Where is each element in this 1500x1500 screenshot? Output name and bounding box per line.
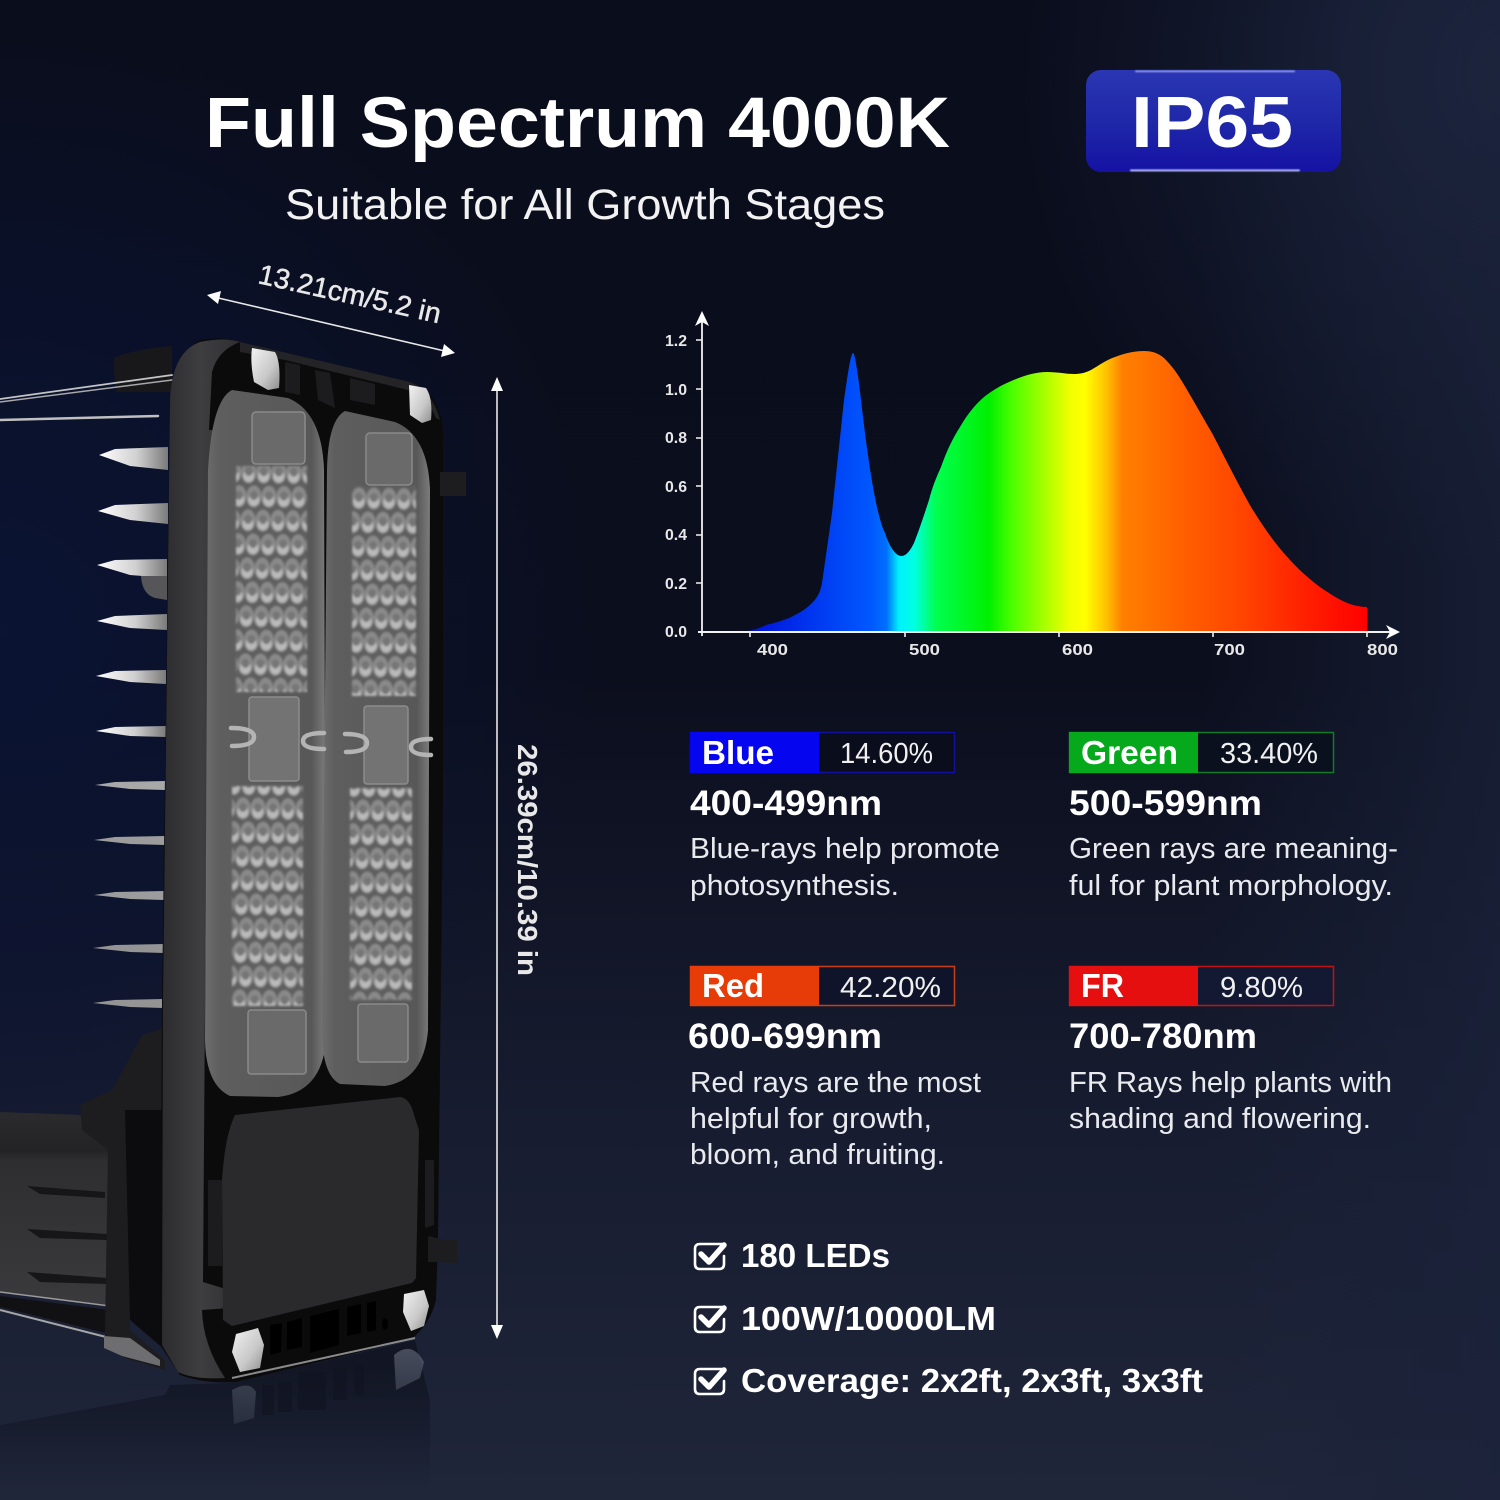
feature: coverage: Coverage: 2x2ft, 2x3ft, 3x3ft bbox=[741, 1362, 1203, 1399]
badge: FR bbox=[1069, 966, 1334, 1006]
x axis labels bbox=[757, 642, 1398, 659]
y axis labels: 0.6 bbox=[665, 479, 687, 496]
description: bloom, and fruiting. bbox=[690, 1139, 945, 1171]
width arrow bbox=[207, 291, 455, 357]
description: photosynthesis. bbox=[690, 870, 899, 902]
range: 500-599nm bbox=[1069, 784, 1262, 823]
top frame edge bbox=[240, 342, 440, 420]
description: helpful for growth, bbox=[690, 1103, 932, 1135]
x axis labels: 400 bbox=[757, 642, 788, 659]
LEDs upper left bbox=[236, 466, 307, 692]
LEDs lower right bbox=[350, 788, 412, 1000]
panel: far red band bbox=[1069, 966, 1392, 1135]
height arrow bbox=[491, 377, 503, 1339]
right lens bbox=[322, 411, 430, 1086]
y axis labels: 1.2 bbox=[665, 333, 687, 350]
subtitle: Suitable for All Growth Stages bbox=[285, 181, 885, 229]
feature: wattage: 100W/10000LM bbox=[741, 1300, 996, 1337]
badge: green: 33.40% bbox=[1220, 738, 1318, 770]
fixture body bbox=[160, 338, 443, 1382]
description: Red rays are the most bbox=[690, 1067, 981, 1099]
spectrum chart bbox=[665, 311, 1400, 659]
clip bottom bbox=[358, 1004, 408, 1062]
description: FR Rays help plants with bbox=[1069, 1067, 1392, 1099]
description bbox=[690, 833, 1000, 902]
panel: red band bbox=[688, 966, 981, 1171]
top magnets bbox=[251, 348, 431, 423]
y axis labels: 0.4 bbox=[665, 527, 687, 544]
LEDs upper right bbox=[352, 486, 416, 696]
range: 400-499nm bbox=[690, 784, 882, 823]
y axis labels: 0.8 bbox=[665, 430, 687, 447]
badge: red: Red bbox=[702, 967, 764, 1004]
y axis labels: 1.0 bbox=[665, 382, 687, 399]
icon: checkbox bbox=[695, 1369, 724, 1394]
badge: blue: 14.60% bbox=[840, 738, 933, 770]
badge: FR: FR bbox=[1081, 967, 1124, 1004]
badge: blue: Blue bbox=[702, 734, 774, 771]
knob on top of heat sink bbox=[114, 346, 172, 392]
badge: FR: 9.80% bbox=[1220, 972, 1303, 1004]
badge: green: Green bbox=[1081, 734, 1178, 771]
clip bottom bbox=[248, 1010, 306, 1074]
badge: IP65: IP65 bbox=[1131, 83, 1293, 163]
front pillar of frame bbox=[162, 340, 240, 1378]
left lens bbox=[205, 390, 326, 1097]
spectrum curve bbox=[747, 351, 1367, 632]
mounting arm and bracket bbox=[0, 1028, 165, 1370]
side mounting tabs bbox=[428, 472, 466, 1263]
dimension: height bbox=[491, 377, 543, 1339]
description: ful for plant morphology. bbox=[1069, 870, 1393, 902]
clip middle bbox=[364, 706, 408, 784]
badge: red bbox=[690, 966, 954, 1006]
description bbox=[690, 1067, 981, 1171]
structural ribs between lenses bbox=[208, 362, 434, 1266]
x axis labels: 600 bbox=[1062, 642, 1093, 659]
icon: checkbox bbox=[695, 1307, 724, 1332]
badge: green bbox=[1069, 732, 1334, 773]
bottom magnets bbox=[232, 1290, 429, 1372]
x axis labels: 800 bbox=[1367, 642, 1398, 659]
product: LED grow light fixture bbox=[0, 338, 466, 1490]
panel: green band bbox=[1069, 732, 1398, 902]
clip top bbox=[366, 433, 412, 485]
reflection below the fixture bbox=[0, 1340, 430, 1490]
range: 700-780nm bbox=[1069, 1017, 1257, 1056]
hanging wires bbox=[0, 375, 172, 420]
badge: blue bbox=[690, 732, 954, 773]
x axis labels: 500 bbox=[909, 642, 940, 659]
y axis labels: 0.0 bbox=[665, 624, 687, 641]
range: 600-699nm bbox=[688, 1017, 882, 1056]
description: shading and flowering. bbox=[1069, 1103, 1371, 1135]
LEDs lower left bbox=[232, 786, 303, 1006]
driver cover plate bbox=[222, 1097, 419, 1326]
bottom edge highlight bbox=[232, 1338, 415, 1378]
height label: 26.39cm/10.39 in bbox=[512, 744, 543, 976]
dimension: width bbox=[207, 259, 455, 357]
description: Blue-rays help promote bbox=[690, 833, 1000, 865]
clip top bbox=[252, 412, 305, 464]
icon: checkbox bbox=[695, 1244, 724, 1269]
description bbox=[1069, 1067, 1392, 1135]
feature list bbox=[695, 1237, 1203, 1399]
badge: red: 42.20% bbox=[840, 972, 941, 1004]
badge: IP65 bbox=[1086, 70, 1341, 172]
title: Full Spectrum 4000K bbox=[205, 84, 950, 163]
feature: 180 LEDs: 180 LEDs bbox=[741, 1237, 890, 1274]
ventilation slots bbox=[270, 1301, 388, 1355]
panel: blue band bbox=[690, 732, 1000, 902]
y axis labels: 0.2 bbox=[665, 576, 687, 593]
clip middle bbox=[249, 697, 299, 781]
width label: 13.21cm/5.2 in bbox=[256, 259, 444, 329]
y axis labels bbox=[665, 333, 687, 641]
axes bbox=[695, 311, 1400, 639]
lens retaining loops bbox=[231, 728, 431, 755]
description: Green rays are meaning- bbox=[1069, 833, 1398, 865]
x axis labels: 700 bbox=[1214, 642, 1245, 659]
heat sink fins bbox=[93, 447, 168, 1008]
description bbox=[1069, 833, 1398, 902]
